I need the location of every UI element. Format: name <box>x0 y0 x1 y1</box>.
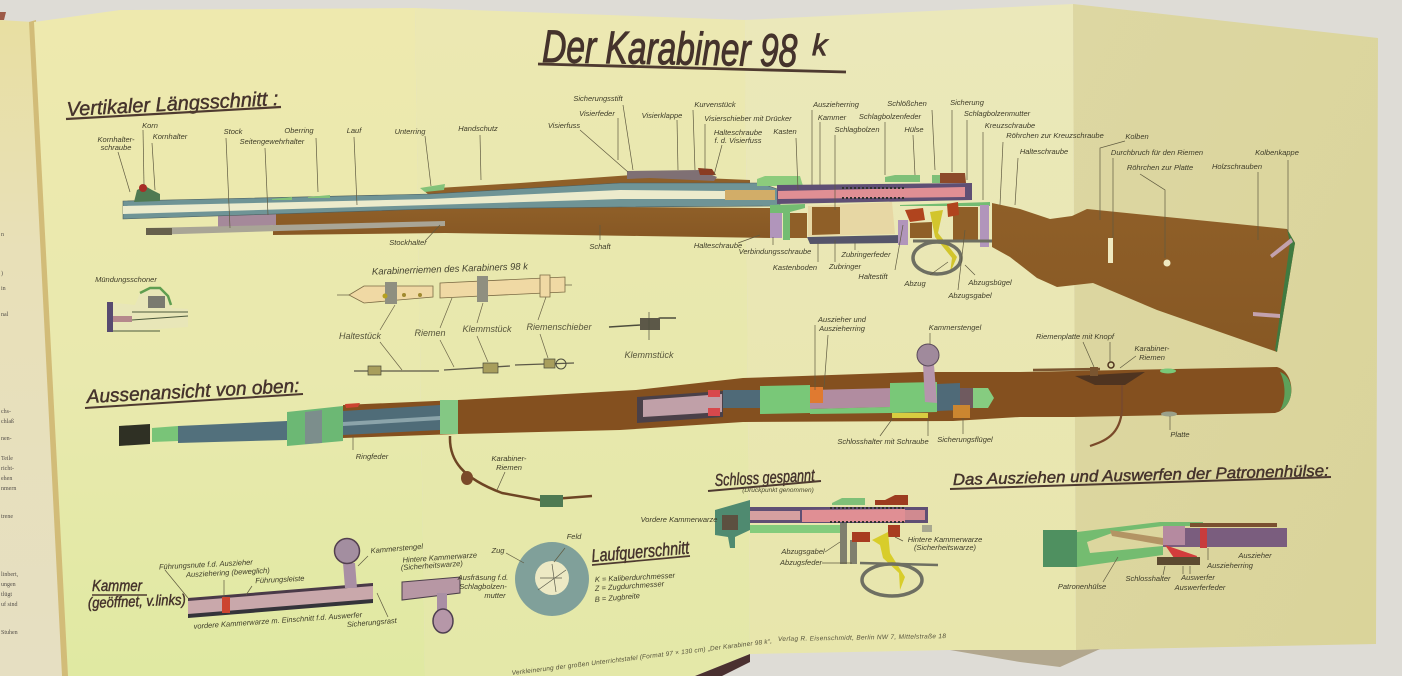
heading: Kammer: Kammer <box>92 578 143 595</box>
labels: Oberring <box>284 126 314 135</box>
labels: Halteschraube <box>694 241 742 250</box>
panel: sheet section 3 <box>745 4 1076 654</box>
labels: Schlosshalter <box>1125 574 1171 583</box>
labels: Schlagbolzenfeder <box>859 112 922 121</box>
top view barrel rear <box>343 405 440 435</box>
top view labels: Ringfeder <box>356 452 389 461</box>
labels: Haltestift <box>858 272 888 281</box>
green underside <box>750 525 840 533</box>
labels: Kornhalter <box>153 132 188 141</box>
labels: Visierklappe <box>642 111 682 120</box>
left page text fragments: ehen <box>1 476 12 482</box>
hanging sling <box>450 436 592 500</box>
labels: Hülse <box>904 125 924 134</box>
labels: Kastenboden <box>773 263 817 272</box>
magazine <box>808 202 895 236</box>
labels: Führungsnute f.d. Auszieher <box>159 558 254 571</box>
screws <box>770 205 989 247</box>
left page text fragments: nal <box>1 312 9 318</box>
heading: Aussenansicht von oben: Aussenansicht von oben: <box>85 376 300 408</box>
labels: Ausfräsung f.d. <box>457 573 508 582</box>
longitudinal section of the rifle <box>98 94 1299 352</box>
labels: f. d. Visierfuss <box>715 136 762 145</box>
barrel ring <box>515 542 589 616</box>
chamber <box>725 190 775 200</box>
labels: Kammerstengel <box>370 542 424 555</box>
firing spring <box>842 188 905 198</box>
bolt body <box>777 183 972 204</box>
top view labels: Kammerstengel <box>929 323 982 332</box>
top view labels <box>353 315 1190 490</box>
labels: Lauf <box>347 126 362 135</box>
labels: Auszieherring <box>1206 561 1254 570</box>
footer publisher line: Verlag R. Eisenschmidt, Berlin NW 7, Mittelstraße 18 <box>778 633 946 643</box>
top view wood <box>343 367 1291 438</box>
handguard wood <box>422 175 750 196</box>
left page text fragments: nmern <box>1 486 16 492</box>
labels: Verbindungsschraube <box>739 247 811 256</box>
labels: Röhrchen zur Kreuzschraube <box>1006 131 1104 140</box>
sling slot <box>1108 238 1113 263</box>
muzzle cover: Mündungsschoner <box>95 275 157 284</box>
left page text fragments: richt- <box>1 466 14 472</box>
ejector <box>1165 545 1197 561</box>
cleaning rod <box>146 221 445 235</box>
labels: Kolbenkappe <box>1255 148 1299 157</box>
sling diagram: Karabinerriemen des Karabiners 98 k <box>372 261 529 278</box>
trigger guard <box>913 242 961 274</box>
guard <box>862 564 922 596</box>
stock grey section <box>218 213 276 229</box>
labels: Kammer <box>818 113 847 122</box>
top view barrel front <box>178 421 287 443</box>
top view labels: Riemen <box>1139 353 1165 362</box>
labels: Hintere Kammerwarze <box>908 535 982 544</box>
sling diagram <box>337 261 676 375</box>
labels <box>1058 548 1272 592</box>
wood inside <box>910 207 978 240</box>
top view butt cap <box>1280 372 1291 410</box>
labels: Schlagbolzenmutter <box>964 109 1031 118</box>
left page text fragments: uf sind <box>1 601 18 608</box>
clamp detail <box>609 318 676 327</box>
legend: Z = Zugdurchmesser <box>594 579 665 593</box>
callouts: Feld <box>567 532 582 541</box>
magazine floor <box>807 235 902 244</box>
heading: Schloss gespannt <box>708 466 821 491</box>
labels: Vordere Kammerwarze <box>641 515 717 524</box>
sear red <box>905 202 959 222</box>
sling fittings <box>385 276 488 304</box>
left page text fragments: ) <box>1 270 3 277</box>
book left page <box>0 12 70 676</box>
bolt <box>1163 528 1287 547</box>
labels: Schlagbolzen- <box>459 582 507 591</box>
sling strap rear <box>440 277 565 298</box>
stock wood front <box>273 207 772 238</box>
labels: Abzugsgabel <box>780 547 825 556</box>
bolt pink <box>778 187 965 199</box>
labels: Zubringerfeder <box>840 250 891 259</box>
labels: Stockhalter <box>389 238 427 247</box>
sling labels: Klemmstück <box>624 350 674 360</box>
labels: Abzugsgabel <box>947 291 992 300</box>
bolt parts <box>750 507 928 523</box>
labels: Abzug <box>903 279 926 288</box>
labels: Holzschrauben <box>1212 162 1262 171</box>
heading: Schloss gespannt: Schloss gespannt <box>714 466 816 490</box>
labels: Abzugsfeder <box>779 558 823 567</box>
sling labels: Riemen <box>414 328 446 338</box>
sheet shadow <box>950 649 1100 667</box>
labels: Seitengewehrhalter <box>240 137 305 146</box>
panel: sheet section 2 <box>415 8 750 676</box>
labels: Auswerfer <box>1180 573 1215 582</box>
bolt handle <box>343 563 357 588</box>
labels: Sicherungsstift <box>573 94 624 103</box>
sling side view <box>354 363 574 371</box>
footer publisher line <box>511 633 946 676</box>
sling labels: Haltestück <box>339 331 382 341</box>
sling strap front <box>349 286 433 303</box>
labels: Auswerferfeder <box>1174 583 1226 592</box>
labels: (Sicherheitswarze) <box>914 543 977 552</box>
title: k <box>812 29 830 62</box>
footer publisher line: Verkleinerung der großen Unterrichtstafel (Format 97 × 130 cm) „Der Karabiner 98 k“, <box>511 638 772 676</box>
bands <box>272 184 445 200</box>
labels: vordere Kammerwarze m. Einschnitt f.d. Auswerfer <box>193 610 363 631</box>
trigger <box>930 210 957 273</box>
labels: Kolben <box>1125 132 1149 141</box>
top view bolt handle <box>923 365 937 403</box>
left page text fragments: chs- <box>1 409 11 415</box>
barrel <box>123 183 780 219</box>
bolt open view <box>88 538 508 633</box>
labels: Visierschieber mit Drücker <box>704 114 792 123</box>
front sight <box>134 186 160 202</box>
labels: Visierfuss <box>548 121 580 130</box>
labels: Halteschraube <box>1020 147 1068 156</box>
receiver green <box>1077 522 1203 567</box>
frame <box>840 523 857 564</box>
heading: Das Ausziehen und Auswerfen: Das Ausziehen und Auswerfen der Patronenhülse: <box>953 463 1329 489</box>
panel: sheet section 4 <box>1073 4 1378 650</box>
labels: mutter <box>484 591 506 600</box>
barrel bore <box>123 190 725 214</box>
labels: Abzugsbügel <box>967 278 1012 287</box>
extraction section <box>950 463 1331 592</box>
left page text fragments: chlaß <box>1 418 14 425</box>
left page text fragments: linbert, <box>1 572 19 578</box>
butt plate <box>1275 229 1295 352</box>
labels: Kasten <box>773 127 797 136</box>
top view labels: Schlosshalter mit Schraube <box>837 437 929 446</box>
left page text fragments: tlügt <box>1 592 12 598</box>
labels: Halteschraube <box>714 128 762 137</box>
top view labels: Sicherungsflügel <box>937 435 993 444</box>
left page text fragments: Teile <box>1 456 13 462</box>
cocked bolt section: (Druckpunkt genommen) <box>742 487 814 494</box>
labels: Führungsleiste <box>255 574 305 585</box>
top view labels: Platte <box>1170 430 1190 439</box>
butt stock <box>992 203 1295 352</box>
left page text fragments: ungen <box>1 582 16 588</box>
labels: Kurvenstück <box>694 100 737 109</box>
bottom dark corner <box>695 654 750 676</box>
left page text fragments: n <box>1 232 4 238</box>
labels: Zubringer <box>828 262 862 271</box>
labels: schraube <box>101 143 131 152</box>
heading: Kammer <box>88 578 186 612</box>
labels: Schlagbolzen <box>834 125 880 134</box>
top view band <box>440 400 458 434</box>
top view receiver <box>723 390 760 408</box>
top view labels: Karabiner- <box>1135 344 1170 353</box>
bolt body <box>188 583 373 617</box>
top view magazine <box>637 391 723 423</box>
callouts: Zug <box>491 546 505 555</box>
labels <box>98 94 1299 300</box>
labels: Auszieherring <box>812 100 860 109</box>
left page text fragments <box>1 232 19 636</box>
heading: Kammer: (geöffnet, v.links) <box>88 592 186 612</box>
title: Der Karabiner 98 <box>542 20 798 76</box>
rear bolt detail <box>402 577 460 600</box>
callouts <box>491 532 582 563</box>
top view of the rifle <box>119 315 1291 507</box>
labels: Sicherung <box>950 98 985 107</box>
top view labels: Auszieher und <box>817 315 867 324</box>
left page text fragments: Stuhen <box>1 630 18 636</box>
top view labels: Karabiner- <box>492 454 527 463</box>
labels: Röhrchen zur Platte <box>1127 163 1193 172</box>
labels <box>641 515 982 567</box>
heading: Laufquerschnitt: Laufquerschnitt <box>591 537 691 566</box>
top view muzzle <box>119 424 150 446</box>
left page text fragments: nen- <box>1 436 12 442</box>
labels: Korn <box>142 121 158 130</box>
left page text fragments: trene <box>1 514 13 520</box>
legend: K = Kaliberdurchmesser <box>595 571 676 584</box>
labels: Schlößchen <box>887 99 927 108</box>
labels: Schaft <box>589 242 612 251</box>
labels: Visierfeder <box>579 109 615 118</box>
receiver top green <box>757 176 803 186</box>
trigger <box>872 532 905 590</box>
top view bands <box>287 406 343 446</box>
labels: Auszieher <box>1237 551 1272 560</box>
labels: Durchbruch für den Riemen <box>1111 148 1203 157</box>
labels: Kornhalter- <box>98 135 135 144</box>
top view sling plate <box>1075 372 1145 385</box>
labels: Ausziehering (beweglich) <box>185 566 270 579</box>
receiver underside green <box>770 202 990 240</box>
sling labels: Riemenschieber <box>526 322 593 332</box>
labels: Hintere Kammerwarze <box>402 550 477 565</box>
labels: Unterring <box>395 127 426 136</box>
labels: (Sicherheitswarze) <box>401 559 464 572</box>
cocked bolt section <box>641 466 982 596</box>
labels: Patronenhülse <box>1058 582 1106 591</box>
sling labels <box>339 322 674 360</box>
panel: sheet section 1 <box>34 8 425 676</box>
legend <box>594 571 676 604</box>
heading: Vertikaler Längsschnitt: Vertikaler Längsschnitt : <box>66 88 279 121</box>
muzzle cover <box>95 275 188 332</box>
sling labels: Klemmstück <box>462 324 512 334</box>
labels <box>159 542 508 631</box>
cartridge <box>1110 530 1163 545</box>
barrel cross-section <box>491 532 691 616</box>
front of receiver <box>715 500 750 548</box>
labels: Stock <box>224 127 244 136</box>
legend: B = Zugbreite <box>594 591 640 604</box>
labels: Sicherungsrast <box>346 616 398 629</box>
top view labels: Auszieherring <box>818 324 866 333</box>
left page text fragments: in <box>1 286 6 292</box>
rear sight <box>627 170 717 181</box>
top view labels: Riemenplatte mit Knopf <box>1036 332 1115 341</box>
top view labels: Riemen <box>496 463 522 472</box>
labels: Handschutz <box>458 124 498 133</box>
labels: Kreuzschraube <box>985 121 1035 130</box>
